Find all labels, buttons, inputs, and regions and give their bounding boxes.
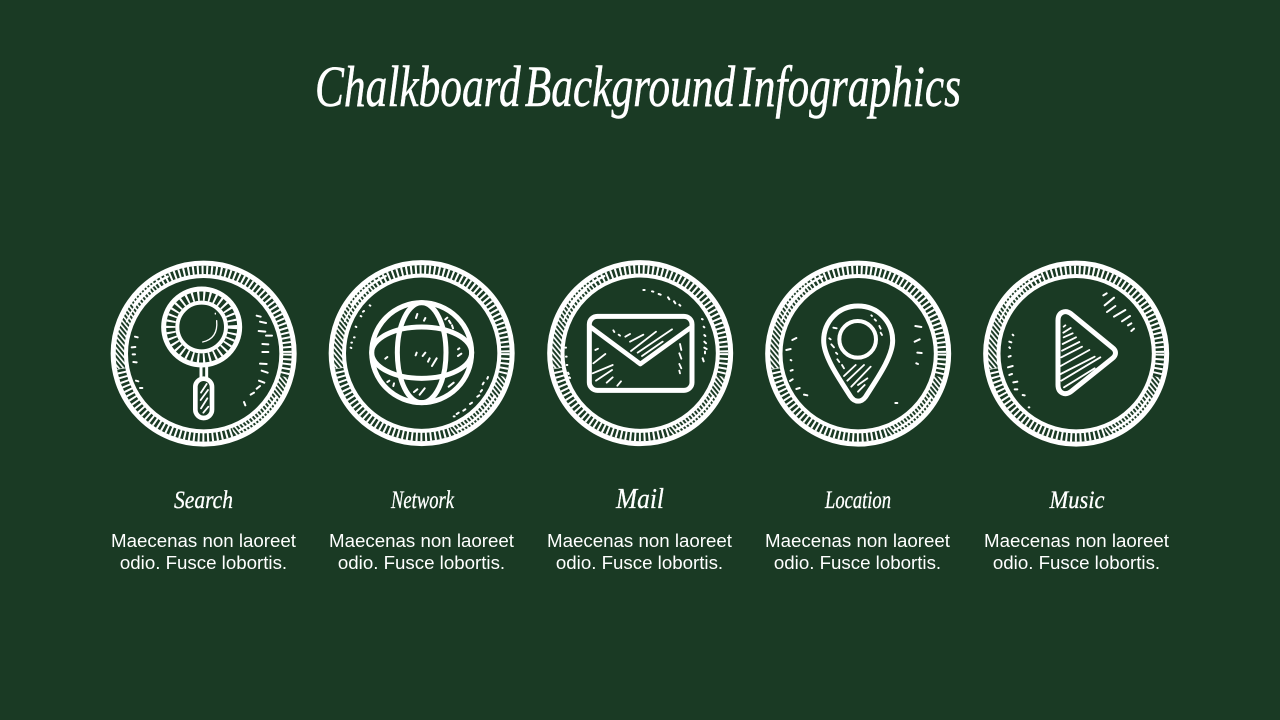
music description: odio. Fusce lobortis. — [993, 552, 1160, 573]
location label: Location — [824, 487, 891, 514]
icon: magnifying glass — [132, 289, 272, 418]
mail description: odio. Fusce lobortis. — [556, 552, 723, 573]
icon: map pin — [786, 306, 922, 403]
music label: Music — [1049, 487, 1104, 514]
network label: Network — [390, 487, 455, 514]
icon: envelope — [565, 290, 707, 390]
icon: location ring — [768, 263, 949, 444]
mail description: Maecenas non laoreet — [547, 530, 733, 551]
icon: play triangle — [1008, 293, 1134, 407]
panel: search — [113, 263, 294, 444]
music description: Maecenas non laoreet — [984, 530, 1170, 551]
panel: location — [768, 263, 949, 444]
location description: Maecenas non laoreet — [765, 530, 951, 551]
network description: Maecenas non laoreet — [329, 530, 515, 551]
title: Chalkboard Background Infographics — [315, 54, 961, 119]
panel: mail — [550, 263, 731, 444]
icon: globe — [351, 303, 488, 416]
panel: network — [331, 263, 512, 444]
icon: mail ring — [550, 263, 731, 444]
search description: odio. Fusce lobortis. — [120, 552, 287, 573]
icon: search ring — [113, 263, 294, 444]
location description: odio. Fusce lobortis. — [774, 552, 941, 573]
panel: music — [986, 263, 1167, 444]
search label: Search — [174, 487, 233, 514]
search description: Maecenas non laoreet — [111, 530, 297, 551]
icon: music ring — [986, 263, 1167, 444]
mail label: Mail — [615, 484, 664, 515]
network description: odio. Fusce lobortis. — [338, 552, 505, 573]
icon: network ring — [331, 263, 512, 444]
